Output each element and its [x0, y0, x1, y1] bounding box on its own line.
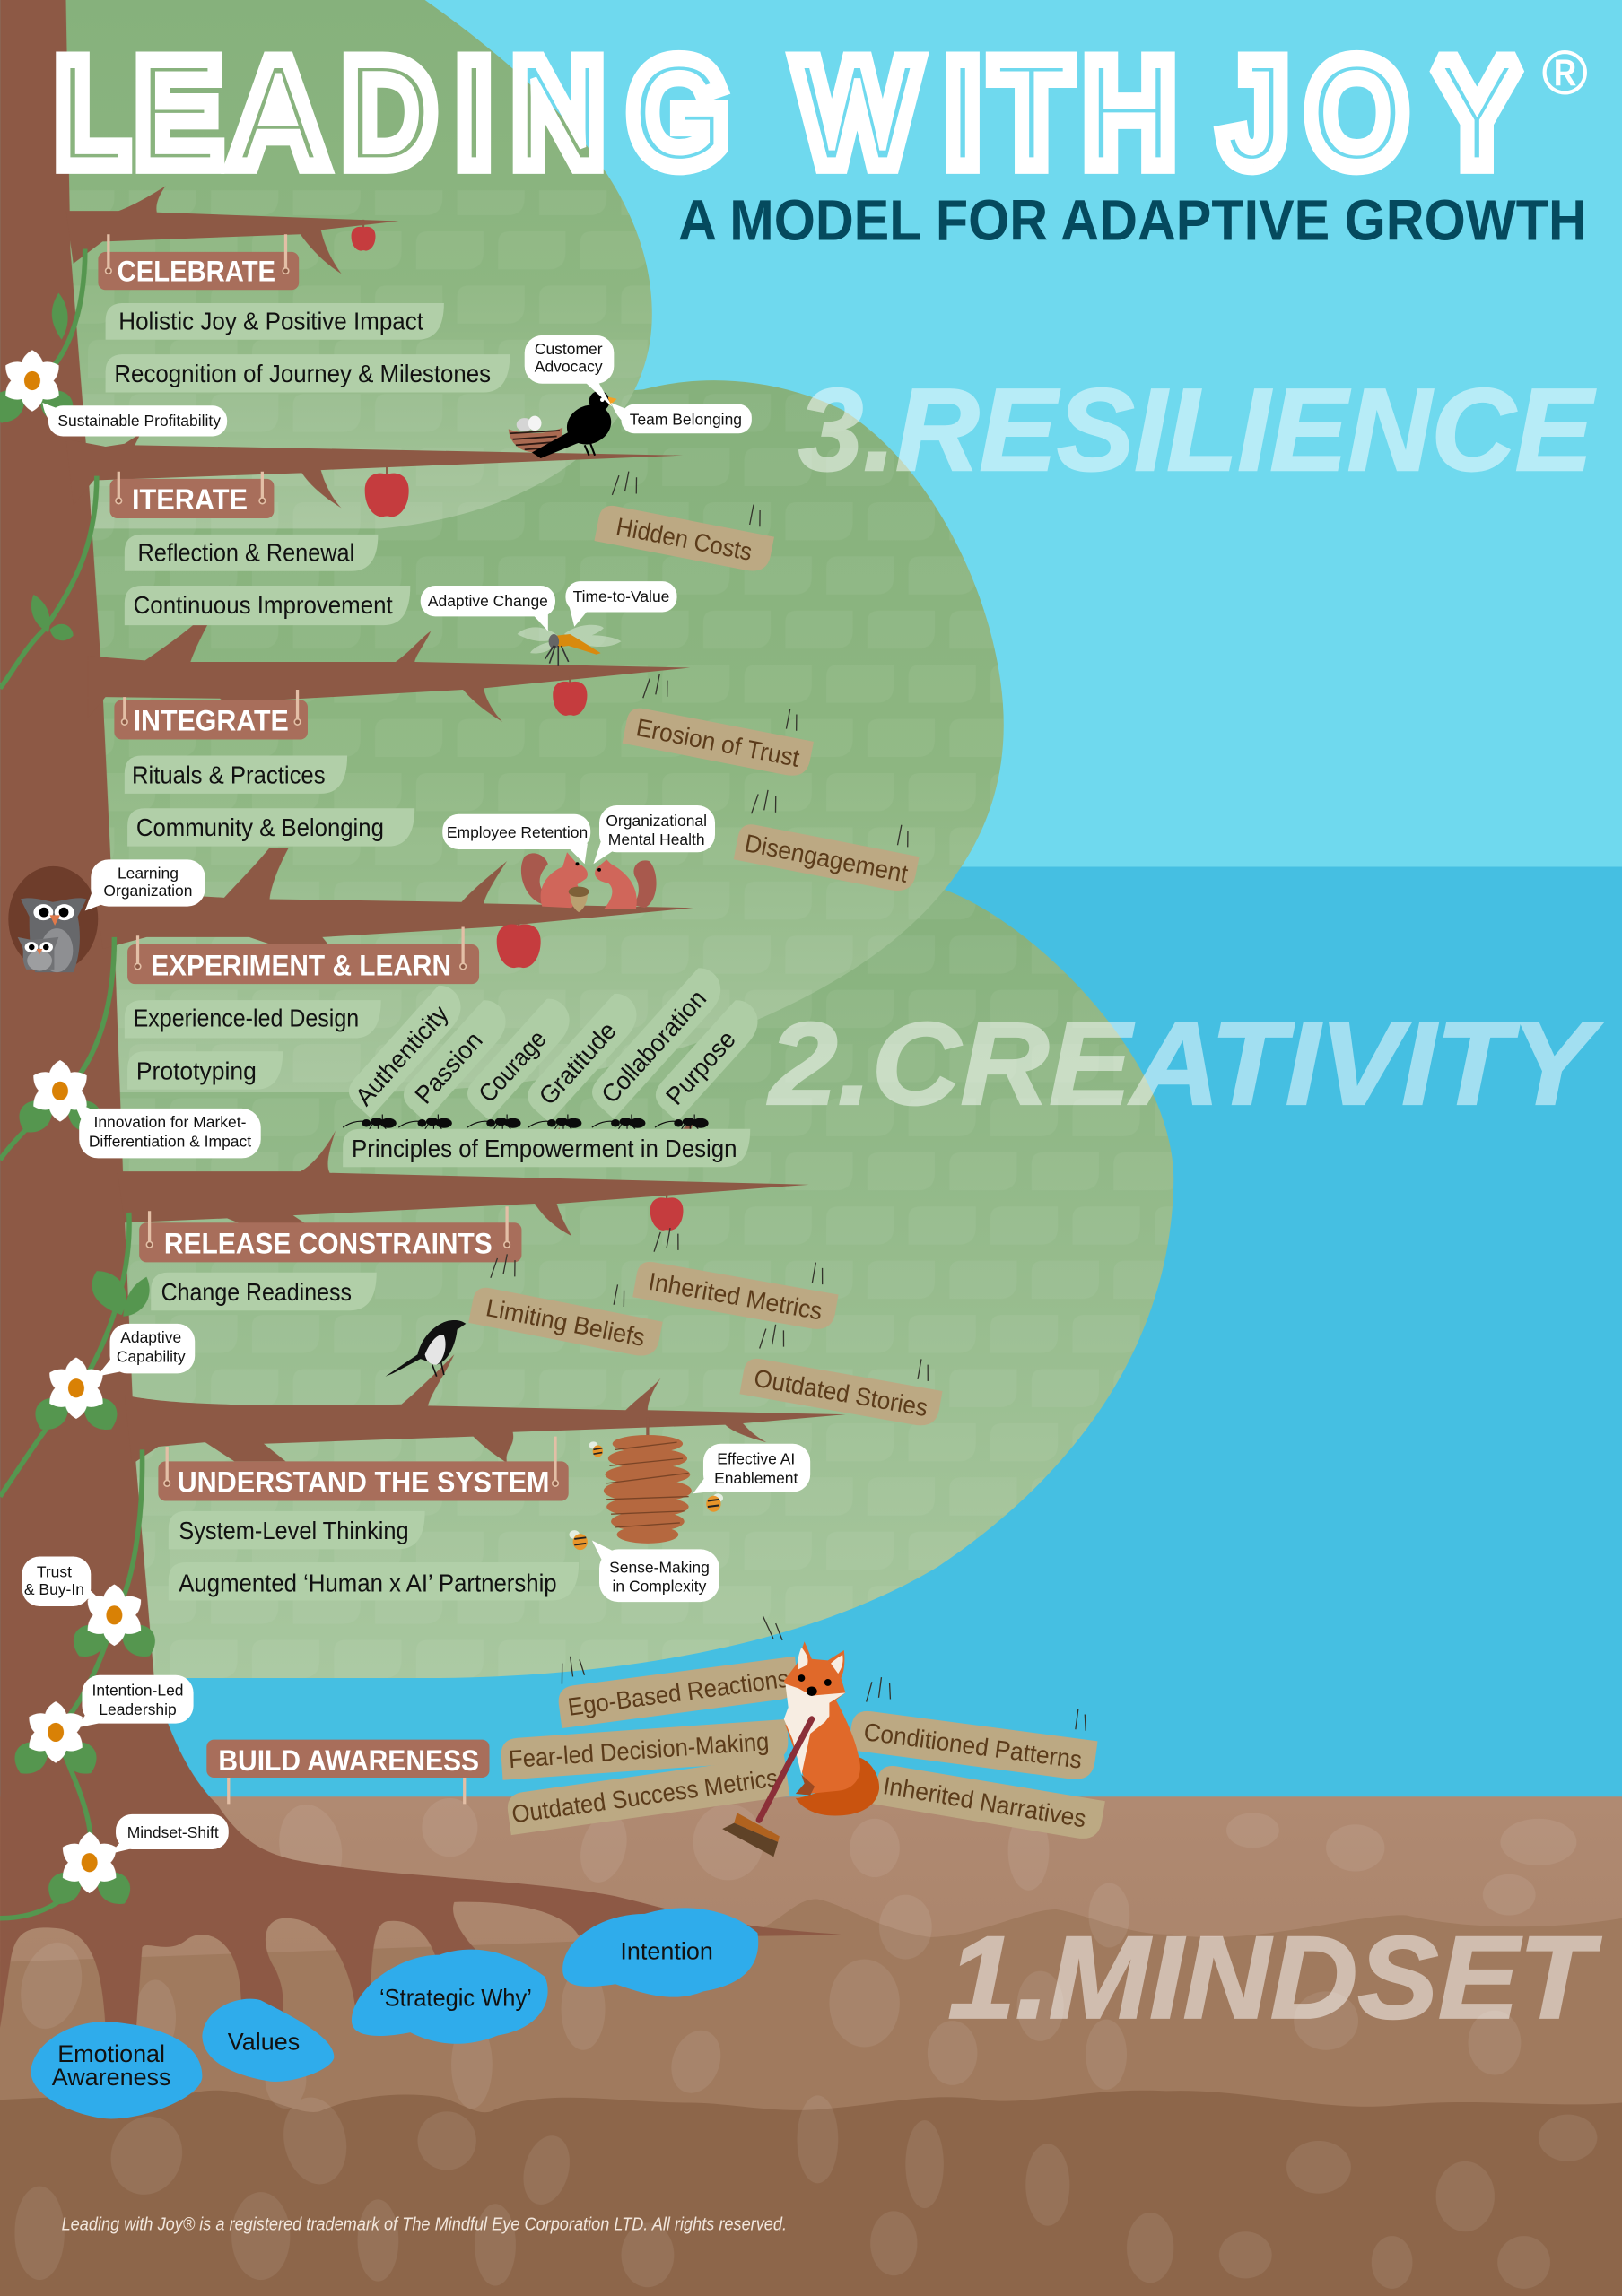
- speech bubble: Organizational Mental Health: [593, 805, 715, 864]
- pill: System-Level Thinking: [169, 1511, 425, 1549]
- speech bubble: Adaptive Capability: Capability: [117, 1347, 186, 1365]
- label: Erosion of Trust: [623, 670, 821, 779]
- flower: Trust: [74, 1585, 155, 1657]
- speech bubble: Time-to-Value: [565, 581, 677, 627]
- speech bubble: Employee Retention: Employee Retention: [447, 823, 588, 841]
- speech bubble: Mindset-Shift: Mindset-Shift: [127, 1823, 219, 1841]
- water pool: Emotional Awareness: Awareness: [52, 2064, 171, 2091]
- speech bubble: Adaptive Change: [421, 586, 555, 631]
- sign: Experiment & Learn: [127, 926, 479, 984]
- principle: Gratitude: [521, 989, 647, 1123]
- speech bubble: Sense-Making: in Complexity: [613, 1578, 707, 1596]
- pill: Augmented Human x AI: Augmented ‘Human x AI’ Partnership: [179, 1570, 557, 1597]
- flower: Adaptive Capability: [35, 1357, 117, 1430]
- principle: Courage: Courage: [473, 1025, 552, 1108]
- principle: Authenticity: [342, 981, 471, 1118]
- vine leaves: [31, 293, 150, 1317]
- principle: Purpose: [649, 996, 768, 1122]
- water background: [0, 867, 1622, 1804]
- ants: [343, 1114, 709, 1135]
- branches: [65, 186, 845, 1465]
- speech bubble: Customer Advocacy: [525, 335, 614, 407]
- label: Hidden Costs: Hidden Costs: [614, 512, 754, 566]
- label: Disengagement: Disengagement: [743, 829, 911, 888]
- label: Inherited Metrics: Inherited Metrics: [647, 1267, 824, 1325]
- blackbird: [532, 391, 617, 458]
- speech bubble: Sustainable Profitability: Sustainable Profitability: [57, 412, 221, 430]
- label: Outdated Stories: Outdated Stories: [752, 1364, 930, 1422]
- speech bubble: Organizational Mental Health: Organizational: [606, 812, 707, 830]
- speech bubble: Team Belonging: Team Belonging: [630, 410, 742, 428]
- principle: Collaboration: [586, 963, 730, 1118]
- speech bubble: Adaptive Capability: [97, 1324, 195, 1377]
- speech bubble: Effective AI: Effective AI: [717, 1450, 795, 1468]
- heading: 3. Resilience: 3.RESILIENCE: [798, 364, 1596, 495]
- sign: Build Awareness: BUILD AWARENESS: [218, 1744, 479, 1777]
- title: LEADING WITH JOY: [57, 35, 1518, 192]
- tree canopy: creativity tier: [74, 887, 1173, 1678]
- speech bubble: Mindset-Shift: [109, 1814, 229, 1854]
- sign: Celebrate: [98, 234, 299, 290]
- apples: [352, 220, 683, 1231]
- principle: Collaboration: Collaboration: [596, 985, 711, 1109]
- label: Inherited Narratives: Inherited Narratives: [881, 1771, 1088, 1832]
- heading: 2. Creativity: 2.CREATIVITY: [766, 998, 1602, 1129]
- bee one: [589, 1441, 603, 1457]
- fox with broom: [722, 1641, 879, 1857]
- label: Outdated Success Metrics: Outdated Success Metrics: [510, 1763, 780, 1829]
- speech bubble: Intention-Led: [76, 1675, 194, 1728]
- speech bubble: Innovation: Differentiation & Impact: [89, 1132, 251, 1150]
- sign: Integrate: INTEGRATE: [134, 704, 289, 737]
- speech bubble: Team Belonging: [611, 403, 752, 433]
- flower: Mindset-Shift: [48, 1831, 130, 1904]
- label: Hidden Costs: [594, 467, 781, 574]
- tree trunk and roots: [0, 0, 841, 2028]
- speech bubble: Sense-Making: Sense-Making: [609, 1558, 710, 1576]
- sign: Build Awareness: [206, 1740, 490, 1804]
- sign: Understand the System: UNDERSTAND THE SYSTEM: [178, 1465, 549, 1499]
- tree canopy: resilience tier: [58, 380, 1004, 1092]
- pill: Community: Community & Belonging: [136, 813, 384, 841]
- pill: Prototyping: [127, 1051, 283, 1090]
- speech bubble: Employee Retention: [442, 814, 590, 864]
- principle: Gratitude: Gratitude: [533, 1016, 622, 1110]
- speech bubble: Adaptive Change: Adaptive Change: [428, 592, 548, 610]
- sky background: [0, 0, 1622, 868]
- principle: Passion: Passion: [409, 1026, 488, 1109]
- label: Outdated Stories: [739, 1320, 949, 1429]
- pill: Prototyping: Prototyping: [136, 1057, 257, 1084]
- label: Fear-led Decision-Making: Fear-led Decision-Making: [508, 1727, 770, 1773]
- speech bubble: Learning Organization: Learning: [118, 865, 179, 883]
- label: Inherited Metrics: [632, 1223, 845, 1332]
- vines: [0, 249, 143, 1918]
- heading: 1. Mindset: 1.MINDSET: [948, 1912, 1601, 2043]
- water pool: Intention: Intention: [620, 1937, 713, 1964]
- speech bubble: Time-to-Value: Time-to-Value: [573, 587, 669, 605]
- speech bubble: Intention-Led: Leadership: [99, 1700, 177, 1718]
- water pool: Strategic Why: ‘Strategic Why’: [379, 1985, 532, 2012]
- squirrels with acorn: [521, 852, 657, 912]
- label: Ego-Based Reactions: Ego-Based Reactions: [566, 1665, 790, 1721]
- pill: Experience-led: Experience-led Design: [134, 1004, 359, 1031]
- speech bubble: Sustainable Profitability: [42, 403, 227, 437]
- ground soil layers: [0, 1796, 1622, 2296]
- sign: Iterate: ITERATE: [132, 483, 248, 516]
- dragonfly: [518, 625, 621, 666]
- pill: Reflection: Reflection & Renewal: [138, 538, 354, 566]
- principle: Courage: [461, 994, 580, 1120]
- pill: Community: [127, 808, 414, 847]
- pill: Rituals: [125, 755, 347, 794]
- speech bubble: Learning Organization: Organization: [103, 882, 192, 900]
- water pool: Emotional Awareness: [31, 2022, 202, 2118]
- label: Limiting Beliefs: [468, 1249, 669, 1359]
- flower: Sustainable Profitability: [0, 350, 73, 422]
- footer trademark note: Leading with Joy® is a registered trademark of The Mindful Eye Corporation LTD. All rights reserved.: [62, 2215, 787, 2235]
- speech bubble: Organizational Mental Health: Mental Health: [608, 831, 705, 848]
- label: Disengagement: [734, 787, 926, 894]
- speech bubble: Sense-Making: [592, 1541, 719, 1602]
- magpie: [386, 1320, 466, 1377]
- tree canopy: top tier: [44, 0, 652, 528]
- water pool: Emotional Awareness: Emotional: [57, 2040, 165, 2067]
- pill: Change Readiness: Change Readiness: [161, 1278, 352, 1306]
- pill: Principles of Empowerment: Principles of Empowerment in Design: [352, 1135, 737, 1162]
- pill: Change Readiness: [151, 1273, 377, 1310]
- speech bubble: Customer Advocacy: Customer: [535, 340, 603, 358]
- owl hollow with owls: [8, 866, 98, 972]
- principle: Purpose: Purpose: [660, 1025, 741, 1110]
- label: Conditioned Patterns: [848, 1674, 1103, 1782]
- speech bubble: Adaptive Capability: Adaptive: [120, 1328, 181, 1346]
- speech bubble: Innovation: Innovation for Market-: [93, 1113, 247, 1131]
- sign: Release Constraints: [139, 1206, 521, 1262]
- speech bubble: Intention-Led: Intention-Led: [92, 1682, 184, 1700]
- pill: Continuous Improvement: Continuous Improvement: [134, 591, 393, 619]
- speech bubble: Customer Advocacy: Advocacy: [535, 358, 603, 376]
- speech bubble: Learning Organization: [85, 859, 205, 911]
- principle: Authenticity: Authenticity: [350, 1000, 454, 1110]
- sign: Celebrate: CELEBRATE: [118, 254, 275, 287]
- label: Erosion of Trust: Erosion of Trust: [634, 713, 802, 772]
- label: Limiting Beliefs: Limiting Beliefs: [484, 1293, 648, 1352]
- pill: System-Level Thinking: System-Level Thinking: [179, 1517, 409, 1544]
- water pool: Intention: [562, 1908, 758, 1997]
- beehive: [604, 1417, 692, 1544]
- sign: Iterate: [109, 472, 274, 518]
- pill: Experience-led: [125, 1000, 381, 1039]
- flower: Intention-Led: [15, 1701, 97, 1774]
- speech bubble: Effective AI: [693, 1444, 810, 1493]
- speech bubble: Innovation: [74, 1101, 261, 1158]
- pill: Holistic Joy: Holistic Joy & Positive Impact: [118, 307, 423, 335]
- bee three: [570, 1530, 588, 1550]
- water pool: Strategic Why: [352, 1950, 548, 2044]
- nest with eggs: [509, 416, 562, 452]
- flower: Innovation: [19, 1060, 100, 1133]
- pill: Continuous Improvement: [125, 586, 410, 625]
- sign: Integrate: [114, 690, 308, 739]
- water pool: Values: Values: [228, 2029, 300, 2056]
- sign: Understand the System: [158, 1437, 569, 1500]
- speech bubble: Trust: [22, 1557, 100, 1606]
- empowerment principle leaves: [342, 963, 768, 1123]
- speech bubble: Effective AI: Enablement: [714, 1469, 798, 1487]
- label: Ego-Based Reactions: [551, 1613, 800, 1728]
- pill: Principles of Empowerment: [343, 1129, 750, 1167]
- soil rocks: [12, 1798, 1597, 2289]
- water pool: Values: [202, 1999, 334, 2082]
- principle: Passion: [397, 996, 516, 1122]
- speech bubble: Trust: & Buy-In: [24, 1580, 84, 1598]
- pill: Recognition: Recognition of Journey & Milestones: [114, 360, 491, 387]
- bee two: [706, 1493, 723, 1512]
- registered mark: ®: [1542, 39, 1588, 107]
- label: Conditioned Patterns: Conditioned Patterns: [862, 1718, 1084, 1774]
- speech bubble: Trust: Trust: [37, 1562, 72, 1580]
- pill: Rituals: Rituals & Practices: [132, 761, 326, 788]
- sign: Release Constraints: RELEASE CONSTRAINTS: [164, 1227, 493, 1260]
- sign: Experiment & Learn: EXPERIMENT & LEARN: [151, 948, 451, 981]
